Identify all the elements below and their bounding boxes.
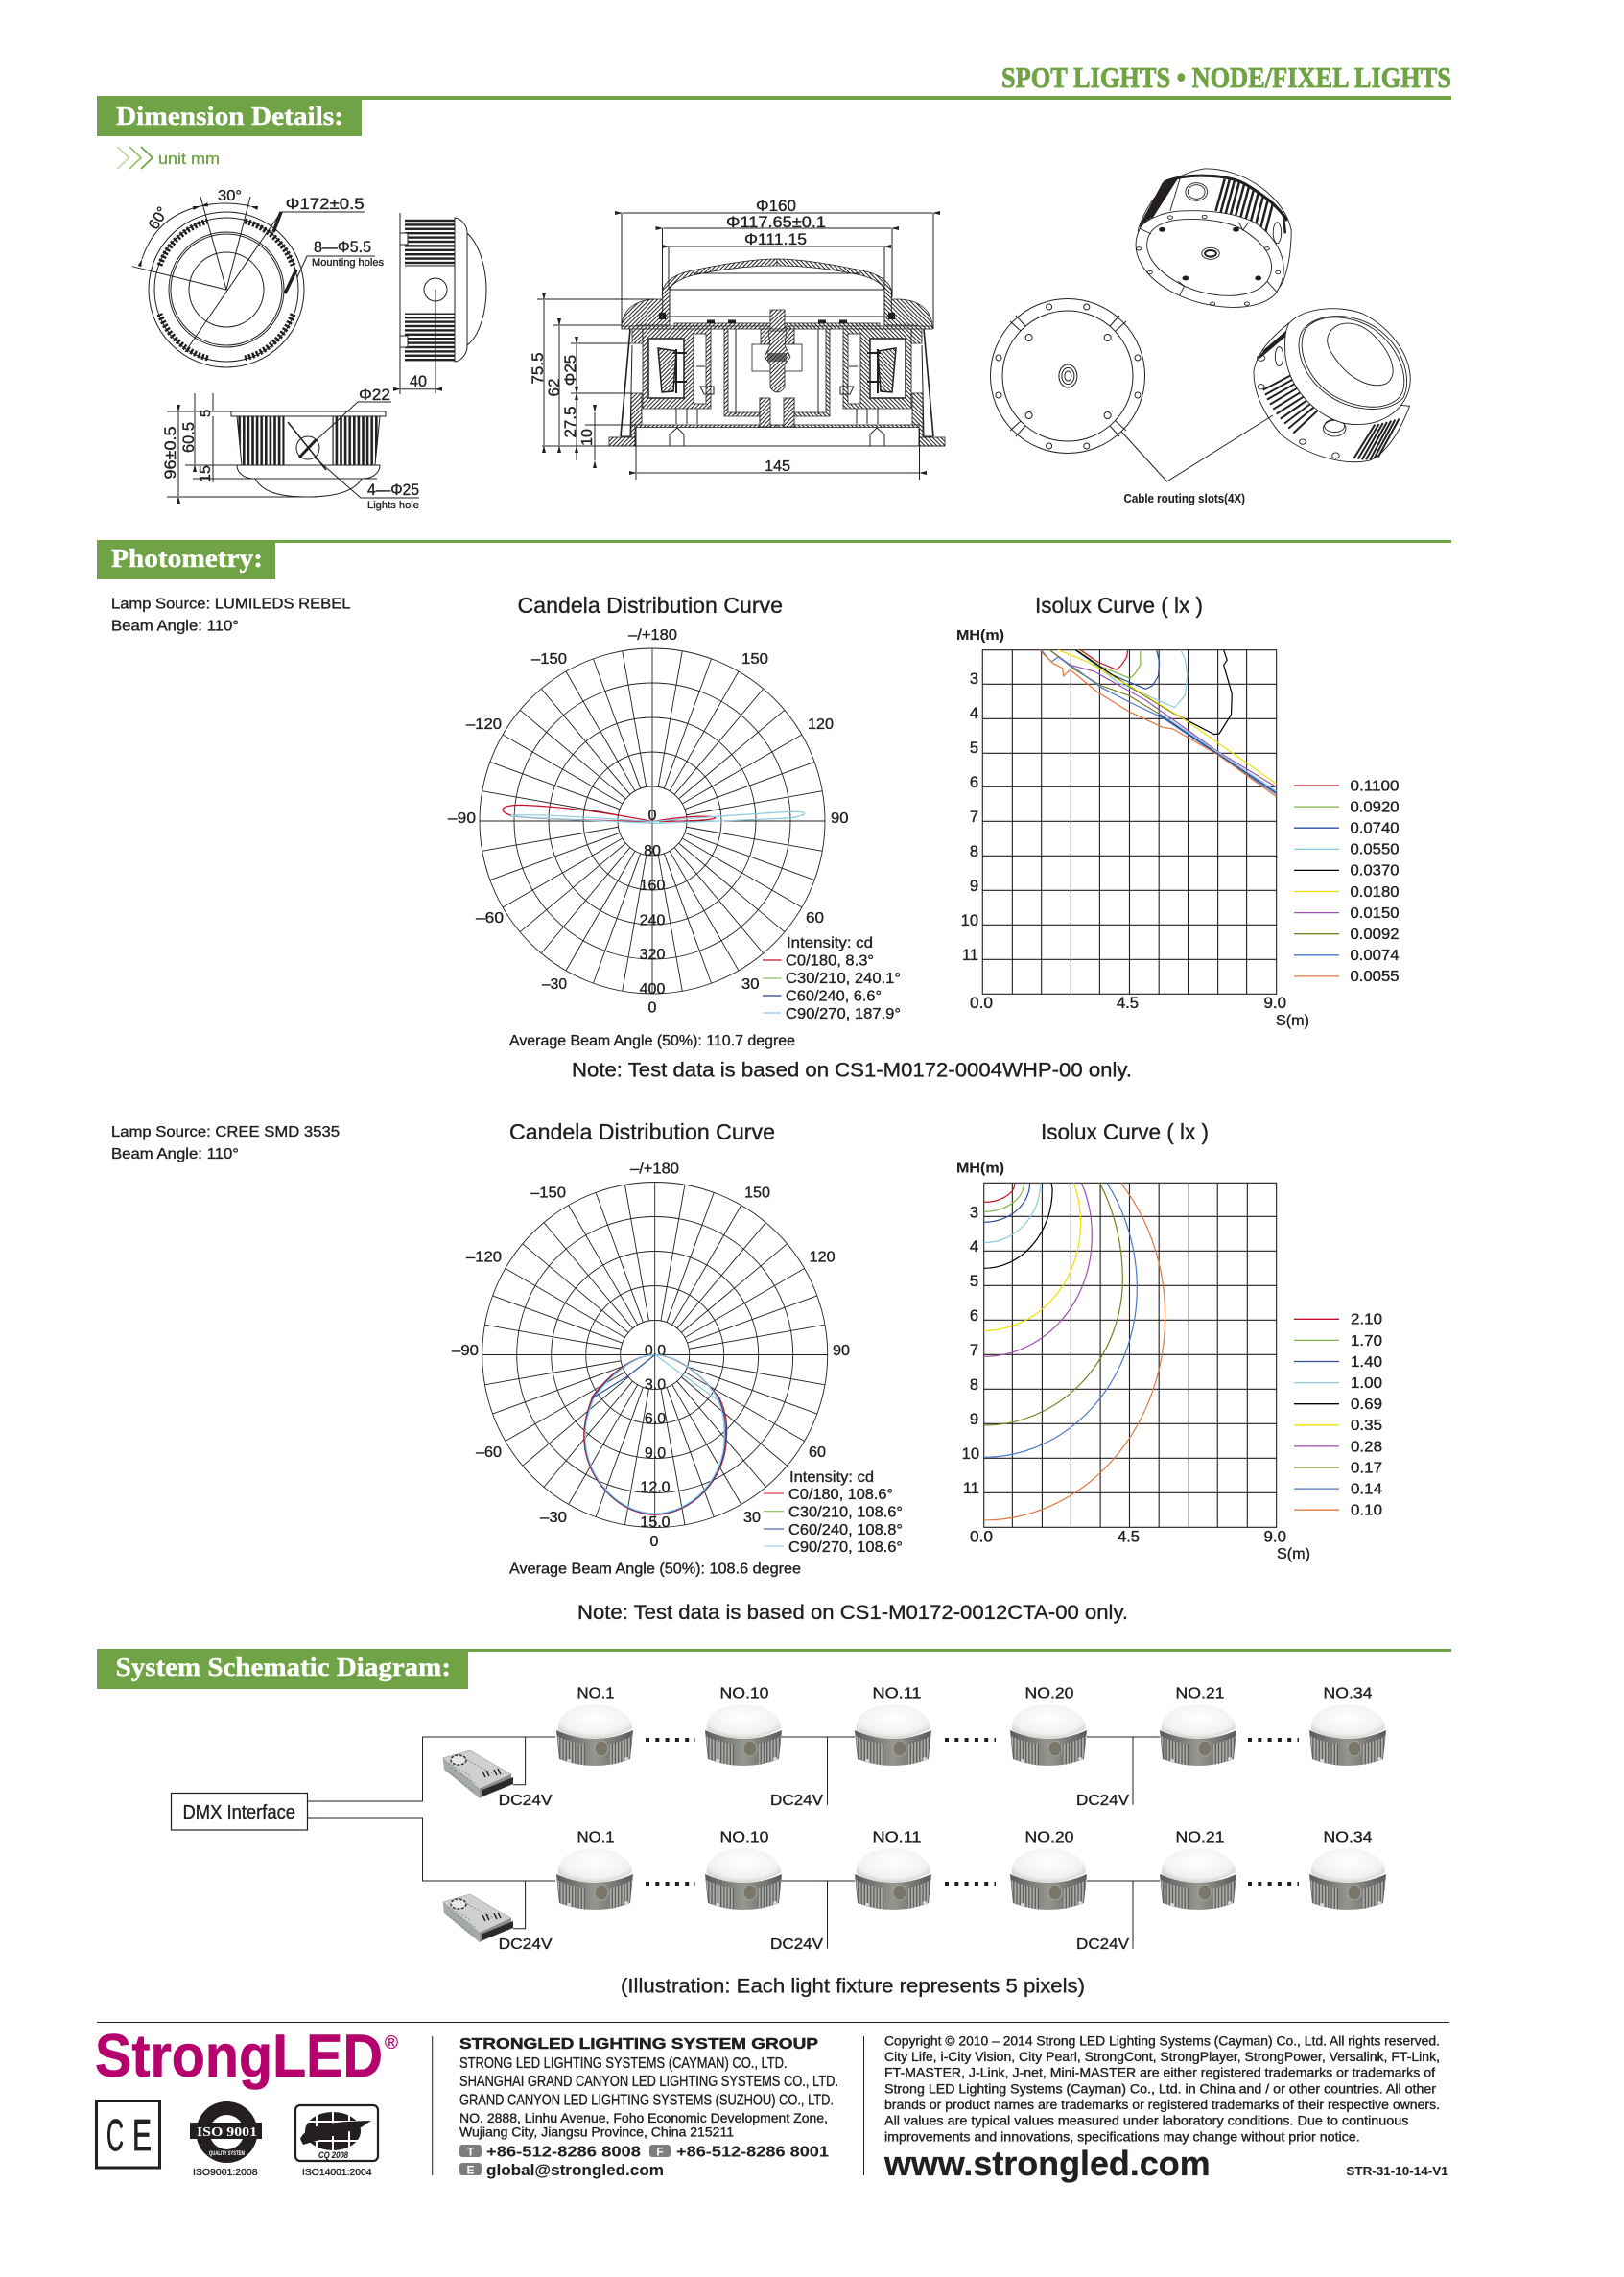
heading: photometry <box>97 541 275 579</box>
badge: ISO 9001 <box>190 2101 262 2178</box>
badge: ISO 14001: CQ 2008 <box>318 2150 348 2160</box>
chart: isolux curve 1: MH(m) <box>956 627 1004 644</box>
text: company addresses: GRAND CANYON LED LIGHTING SYSTEMS (SUZHOU) CO., LTD. <box>459 2093 834 2109</box>
curves: photometric lobes <box>584 1354 727 1514</box>
text: copyright: brands or product names are trademarks or registered trademarks of their respective owners. <box>884 2098 1440 2112</box>
chart: candela distribution curve 1: 240 <box>640 913 665 928</box>
legend: isolux 2: 0.10 <box>1351 1503 1382 1519</box>
chart: isolux curve 2: 4.5 <box>1118 1529 1140 1546</box>
text: copyright: City Life, i-City Vision, City Pearl, StrongCont, StrongPlayer, StrongPower, Versalink, FT-Link, <box>884 2050 1440 2064</box>
section: system schematic diagram <box>97 1649 1451 1998</box>
chart: candela distribution curve 1: 120 <box>808 716 834 733</box>
legend: candela 1: C30/210, 240.1° <box>786 971 901 987</box>
drawing: front view: 30° <box>218 188 242 204</box>
chart: candela distribution curve 1: –60 <box>476 910 504 927</box>
power supply 1 <box>443 1750 513 1798</box>
legend: candela 1: Intensity: cd <box>787 935 873 951</box>
chart: candela distribution curve 2: 0 <box>650 1534 659 1550</box>
row 1 fixtures: NO.1 <box>577 1686 615 1702</box>
chart: candela distribution curve 2: –60 <box>476 1444 502 1461</box>
text: company addresses: STRONGLED LIGHTING SYSTEM GROUP <box>459 2036 818 2053</box>
legend: candela 1: C90/270, 187.9° <box>786 1006 901 1022</box>
chart: isolux curve 2: 6 <box>970 1307 978 1325</box>
chart: candela distribution curve 2: 12.0 <box>640 1480 671 1496</box>
note: test data 1: Note: Test data is based on CS1-M0172-0004WHP-00 only. <box>572 1060 1132 1082</box>
text: copyright: improvements and innovations, specifications may change without prior notice. <box>884 2129 1360 2144</box>
chart: isolux curve 1: 3 <box>970 670 978 688</box>
legend: candela 2: C30/210, 108.6° <box>788 1504 903 1520</box>
icon: email <box>459 2163 482 2177</box>
legend: isolux 1: 0.0092 <box>1351 927 1400 943</box>
drawing: front view: 60° <box>146 204 172 232</box>
text: company addresses: STRONG LED LIGHTING SYSTEMS (CAYMAN) CO., LTD. <box>459 2055 788 2072</box>
chart: isolux curve 1: 8 <box>970 843 978 860</box>
icon: fax: F <box>656 2145 664 2158</box>
legend: isolux 1: 0.0150 <box>1351 905 1400 922</box>
chart: candela distribution curve 2: 150 <box>744 1185 770 1202</box>
note: test data 2: Note: Test data is based on CS1-M0172-0012CTA-00 only. <box>577 1602 1128 1624</box>
chart: candela distribution curve 1: 30 <box>741 976 760 993</box>
heading: photometry: Photometry: <box>111 544 263 573</box>
chart: isolux curve 2 <box>956 1119 1382 1562</box>
chart: isolux curve 1: 10 <box>961 912 978 929</box>
legend: isolux 2: 1.40 <box>1351 1354 1382 1371</box>
unit note <box>117 147 220 169</box>
drawing: bottom view: 5 <box>198 410 214 417</box>
chart: candela distribution curve 2: 60 <box>809 1444 826 1461</box>
chart: isolux curve 1: 0.0 <box>970 995 993 1012</box>
legend: candela 2: C0/180, 108.6° <box>788 1487 893 1503</box>
text: company addresses: +86-512-8286 8008 <box>486 2145 641 2161</box>
power supply 2 <box>443 1894 513 1942</box>
chart: candela distribution curve 2: 3.0 <box>645 1377 666 1394</box>
chart: candela distribution curve 1: 90 <box>831 810 849 827</box>
legend: isolux 2: 0.28 <box>1351 1439 1382 1455</box>
row 2 fixtures <box>443 1830 1386 1953</box>
document code: STR-31-10-14-V1 <box>1346 2165 1448 2178</box>
logo: StrongLED: StrongLED <box>95 2023 383 2090</box>
badge: ISO 9001: QUALITY SYSTEM <box>209 2151 245 2157</box>
chart: isolux curve 2: 0.0 <box>970 1529 993 1546</box>
drawing: cross section: 10 <box>579 429 596 446</box>
drawing: front view: Mounting holes <box>312 257 384 269</box>
row 1 fixtures <box>443 1686 1386 1809</box>
chart: candela distribution curve 2: –30 <box>540 1510 567 1526</box>
chart: isolux curve 2: 7 <box>970 1342 978 1359</box>
icon: telephone <box>459 2145 482 2158</box>
chart: isolux curve 2: 11 <box>963 1480 979 1497</box>
badge: ISO 14001: ISO14001:2004 <box>302 2167 372 2178</box>
chart: candela distribution curve 2: 0.0 <box>645 1343 666 1359</box>
drawing: perspective underside <box>1136 169 1291 307</box>
chart: isolux curve 2: Isolux Curve ( lx ) <box>1041 1119 1209 1144</box>
chart: isolux curve 1: 9 <box>970 878 978 895</box>
chart: candela distribution curve 1: Average Beam Angle (50%): 110.7 degree <box>509 1033 795 1049</box>
row 1 fixtures: NO.34 <box>1324 1686 1373 1702</box>
chart: candela distribution curve 1: –150 <box>531 651 567 668</box>
chart: isolux curve 1: S(m) <box>1276 1013 1309 1029</box>
chart: candela distribution curve 2: 120 <box>810 1250 836 1266</box>
legend: isolux 2: 1.00 <box>1351 1375 1382 1392</box>
legend: isolux 1: 0.0180 <box>1351 884 1400 901</box>
chart: isolux curve 1: 11 <box>962 947 978 964</box>
drawing: cross section: Φ117.65±0.1 <box>726 213 826 231</box>
fixtures row 1 <box>556 1704 1386 1766</box>
chart: isolux curve 2: S(m) <box>1277 1546 1310 1562</box>
chart: isolux curve 1: 5 <box>970 739 978 757</box>
wiring: DMX connections <box>308 1737 555 1881</box>
row 2 fixtures: NO.11 <box>873 1830 922 1846</box>
chart: candela distribution curve 2 <box>452 1119 903 1578</box>
chart: isolux curve 1: 7 <box>970 809 978 826</box>
chart: candela distribution curve 2: Candela Distribution Curve <box>509 1119 775 1144</box>
chart: candela distribution curve 1: 160 <box>640 878 665 894</box>
chart: candela distribution curve 1: –120 <box>466 716 502 733</box>
chart: isolux curve 2: 8 <box>970 1376 978 1394</box>
drawing: bottom view: 60.5 <box>179 422 198 453</box>
drawing: bottom view: Φ22 <box>359 386 390 404</box>
legend: isolux 1: 0.0370 <box>1351 863 1400 880</box>
chart: isolux curve 2: 5 <box>970 1273 978 1290</box>
chart: candela distribution curve 1: 80 <box>644 843 661 859</box>
badge: ISO 9001: ISO 9001 <box>197 2125 257 2140</box>
legend: isolux 2: 2.10 <box>1351 1312 1382 1328</box>
badge: CE mark: E <box>132 2110 152 2160</box>
text: company addresses: SHANGHAI GRAND CANYON LED LIGHTING SYSTEMS CO., LTD. <box>459 2074 838 2090</box>
row 2 fixtures: DC24V <box>1076 1937 1129 1953</box>
chart: candela distribution curve 1: 0 <box>648 808 657 824</box>
heading: dimension details <box>97 96 362 136</box>
drawing: cross section: 145 <box>765 458 790 475</box>
chart: candela distribution curve 1: –/+180 <box>628 627 677 644</box>
text: lamp source 2: Lamp Source: CREE SMD 3535 <box>111 1124 340 1140</box>
chart: candela distribution curve 2: Average Beam Angle (50%): 108.6 degree <box>509 1561 801 1578</box>
chart: isolux curve 1: 6 <box>970 774 978 791</box>
fixtures row 2 <box>556 1848 1386 1910</box>
chart: candela distribution curve 1: –90 <box>448 810 476 827</box>
drawing: cross section: 62 <box>545 379 563 396</box>
text: company addresses: Wujiang City, Jiangsu Province, China 215211 <box>459 2124 734 2140</box>
section: photometry <box>97 540 1451 1624</box>
drawing: back plate <box>990 299 1145 453</box>
footer <box>95 2022 1449 2183</box>
text: copyright: Copyright © 2010 – 2014 Strong LED Lighting Systems (Cayman) Co., Ltd. All rights reserved. <box>884 2034 1440 2049</box>
drawing: cross section: Φ25 <box>561 355 579 386</box>
text: copyright: FT-MASTER, J-Link, J-net, Mini-MASTER are either registered trademarks or trademarks of <box>884 2066 1435 2080</box>
legend: isolux 2: 0.69 <box>1351 1397 1382 1413</box>
badge: ISO 14001 <box>295 2105 378 2178</box>
text: lamp source 1: Beam Angle: 110° <box>111 619 239 635</box>
chart: candela distribution curve 1: Candela Distribution Curve <box>518 593 783 618</box>
drawing: side view <box>400 213 486 394</box>
legend: candela 1: C0/180, 8.3° <box>786 953 874 970</box>
chart: candela distribution curve 1: 60 <box>806 910 824 927</box>
legend: isolux 1 <box>1294 778 1400 985</box>
legend: isolux 1: 0.0074 <box>1351 948 1400 964</box>
chart: isolux curve 1: 4 <box>970 705 978 722</box>
text: copyright <box>884 2034 1440 2144</box>
legend: isolux 1: 0.0920 <box>1351 799 1400 815</box>
legend: isolux 1: 0.0055 <box>1351 969 1400 985</box>
legend: isolux 2 <box>1294 1312 1382 1519</box>
legend: candela 1: C60/240, 6.6° <box>786 988 882 1005</box>
legend: isolux 2: 0.35 <box>1351 1418 1382 1434</box>
drawing: bottom view: 96±0.5 <box>161 426 179 480</box>
chart: candela distribution curve 2: 6.0 <box>645 1411 666 1427</box>
curves: photometric lobes <box>503 805 805 824</box>
drawing: cross section: 27.5 <box>561 406 579 438</box>
drawing: bottom view: 15 <box>198 465 214 482</box>
row 1 fixtures: NO.10 <box>719 1686 769 1702</box>
box: DMX interface: DMX Interface <box>182 1802 295 1823</box>
chart: isolux curve 2: 9 <box>970 1411 978 1428</box>
icon: email: E <box>466 2164 475 2177</box>
legend: isolux 1: 0.0740 <box>1351 821 1400 836</box>
legend: isolux 1: 0.1100 <box>1351 778 1400 794</box>
drawing: bottom view: Lights hole <box>367 500 419 511</box>
drawing: front view: 8—Φ5.5 <box>314 239 371 256</box>
chart: candela distribution curve 1: –30 <box>542 976 567 993</box>
row 2 fixtures: NO.34 <box>1324 1830 1373 1846</box>
badge: CE mark <box>96 2101 159 2168</box>
chart: candela distribution curve 1: 400 <box>640 981 665 998</box>
category title: SPOT LIGHTS • NODE/FIXEL LIGHTS <box>1001 60 1451 94</box>
drawing: cross section: Φ111.15 <box>744 230 807 248</box>
text: lamp source 1: Lamp Source: LUMILEDS REBEL <box>111 597 351 613</box>
heading: system schematic <box>97 1651 468 1689</box>
callout: cable routing slots <box>1121 415 1273 505</box>
chart: isolux curve 1: Isolux Curve ( lx ) <box>1035 593 1203 618</box>
text: company addresses: NO. 2888, Linhu Avenue, Foho Economic Development Zone, <box>459 2110 828 2125</box>
logo: StrongLED: ® <box>385 2033 398 2054</box>
drawing: perspective lens side <box>1254 309 1410 462</box>
chart: candela distribution curve 2: 9.0 <box>645 1445 666 1462</box>
chart: candela distribution curve 2: 90 <box>833 1343 850 1359</box>
heading: system schematic: System Schematic Diagram: <box>116 1653 451 1681</box>
chart: candela distribution curve 2: –150 <box>530 1185 566 1202</box>
drawing: side view: 40 <box>410 372 427 390</box>
drawing: front view: Φ172±0.5 <box>286 195 365 213</box>
text: lamp source 1 <box>111 597 351 635</box>
box: DMX interface <box>171 1794 307 1830</box>
row 2 fixtures: DC24V <box>499 1937 553 1953</box>
text: lamp source 2: Beam Angle: 110° <box>111 1146 239 1162</box>
chart: candela distribution curve 2: –90 <box>452 1343 479 1359</box>
chart: candela distribution curve 2: –/+180 <box>630 1162 679 1178</box>
callout: cable routing slots: Cable routing slots(4X) <box>1124 491 1245 505</box>
chart: isolux curve 2: 3 <box>970 1204 978 1221</box>
unit note: unit mm <box>158 150 220 168</box>
row 2 fixtures: NO.21 <box>1176 1830 1225 1846</box>
chart: candela distribution curve 1 <box>448 593 901 1049</box>
row 2 fixtures: DC24V <box>770 1937 823 1953</box>
legend: candela 2: C90/270, 108.6° <box>788 1539 903 1556</box>
chart: isolux curve 2: 10 <box>962 1445 979 1463</box>
row 2 fixtures: NO.10 <box>719 1830 769 1846</box>
text: company addresses: global@strongled.com <box>486 2161 664 2179</box>
chart: isolux curve 1: 9.0 <box>1264 995 1286 1012</box>
website: www.strongled.com <box>883 2144 1211 2183</box>
chart: isolux curve 2: 4 <box>970 1238 978 1256</box>
legend: isolux 1: 0.0550 <box>1351 842 1400 858</box>
drawing: front view <box>132 188 384 367</box>
row 1 fixtures: NO.20 <box>1024 1686 1074 1702</box>
chart: candela distribution curve 2: 30 <box>743 1510 761 1526</box>
icon: telephone: T <box>467 2145 475 2158</box>
icon: fax <box>649 2145 671 2158</box>
text: company addresses <box>459 2036 838 2179</box>
drawing: cross section: 75.5 <box>529 352 547 385</box>
drawing: bottom view <box>161 386 419 511</box>
chart: candela distribution curve 2: –120 <box>466 1250 502 1266</box>
legend: isolux 2: 1.70 <box>1351 1333 1382 1350</box>
chart: candela distribution curve 2: 15.0 <box>640 1514 671 1531</box>
badge: CE mark: C <box>106 2110 124 2160</box>
chart: isolux curve 2: 9.0 <box>1264 1529 1286 1546</box>
chart: candela distribution curve 1: 320 <box>640 947 665 963</box>
chart: isolux curve 1: 4.5 <box>1117 995 1139 1012</box>
caption: illustration note: (Illustration: Each light fixture represents 5 pixels) <box>621 1976 1085 1998</box>
chart: candela distribution curve 1: 0 <box>648 1000 657 1017</box>
drawing: cross section: Φ160 <box>756 197 796 215</box>
row 1 fixtures: NO.11 <box>873 1686 922 1702</box>
row 1 fixtures: DC24V <box>499 1793 553 1809</box>
text: copyright: All values are typical values measured under laboratory conditions. Due to continuous <box>884 2114 1409 2128</box>
legend: isolux 2: 0.14 <box>1351 1481 1382 1498</box>
chart: isolux curve 1 <box>956 593 1400 1029</box>
text: company addresses: +86-512-8286 8001 <box>676 2145 829 2161</box>
row 2 fixtures: NO.20 <box>1024 1830 1074 1846</box>
text: lamp source 2 <box>111 1124 340 1162</box>
legend: candela 2: C60/240, 108.8° <box>788 1522 903 1538</box>
legend: candela 2 <box>764 1469 903 1556</box>
row 1 fixtures: DC24V <box>770 1793 823 1809</box>
legend: candela 1 <box>763 935 901 1022</box>
section: dimension details <box>97 96 1451 511</box>
drawing: bottom view: 4—Φ25 <box>367 481 419 499</box>
text: copyright: Strong LED Lighting Systems (Cayman) Co., Ltd. in China and / or other countries. All other <box>884 2081 1437 2096</box>
row 1 fixtures: DC24V <box>1076 1793 1129 1809</box>
legend: candela 2: Intensity: cd <box>789 1469 874 1486</box>
legend: isolux 2: 0.17 <box>1351 1460 1382 1476</box>
row 2 fixtures: NO.1 <box>577 1830 615 1846</box>
chart: isolux curve 2: MH(m) <box>956 1161 1004 1177</box>
badge: ISO 9001: ISO9001:2008 <box>193 2167 258 2178</box>
chart: candela distribution curve 1: 150 <box>741 651 768 668</box>
heading: dimension details: Dimension Details: <box>116 102 343 130</box>
drawing: cross section <box>529 197 945 480</box>
row 1 fixtures: NO.21 <box>1176 1686 1225 1702</box>
